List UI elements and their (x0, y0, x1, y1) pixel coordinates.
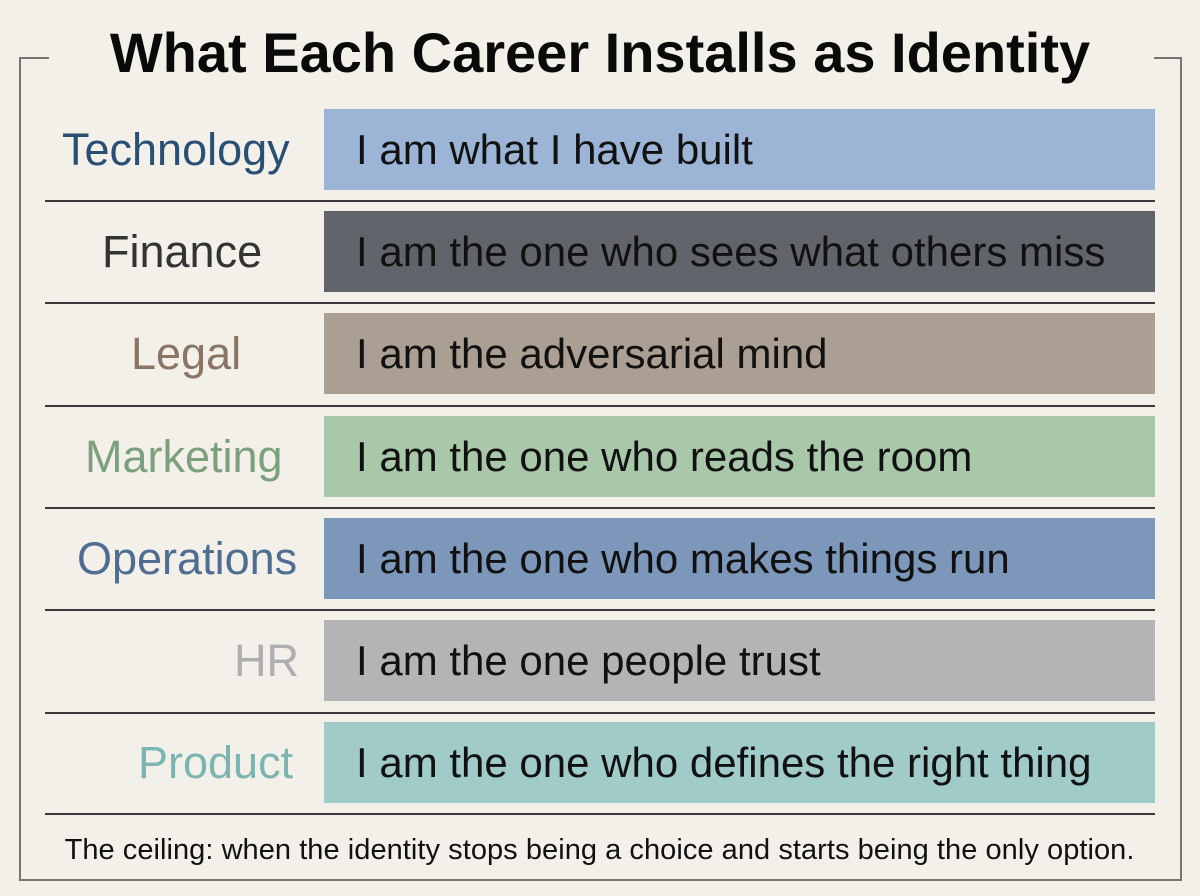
bar: HR: I am the one people trust (356, 637, 821, 684)
label: Product: Product (138, 737, 293, 788)
row: Operations (77, 518, 1155, 599)
bar: Technology (324, 109, 1155, 190)
bar: Legal (324, 313, 1155, 394)
bar: HR (324, 620, 1155, 701)
bar: Legal: I am the adversarial mind (356, 330, 828, 377)
row: HR (234, 620, 1155, 701)
label: Finance: Finance (102, 226, 262, 277)
row: Marketing (85, 416, 1155, 497)
bar: Technology: I am what I have built (356, 126, 753, 173)
label: Operations: Operations (77, 533, 297, 584)
label: HR: HR (234, 635, 299, 686)
row: Legal (131, 313, 1155, 394)
bar: Finance: I am the one who sees what others miss (356, 228, 1105, 275)
label: Legal: Legal (131, 328, 241, 379)
row: Finance (102, 211, 1155, 292)
label: Marketing: Marketing (85, 431, 283, 482)
row: Technology (62, 109, 1155, 190)
bar: Marketing (324, 416, 1155, 497)
bar: Finance (324, 211, 1155, 292)
bar: Product (324, 722, 1155, 803)
title: What Each Career Installs as Identity (110, 21, 1090, 84)
bar: Operations (324, 518, 1155, 599)
bar: Operations: I am the one who makes things run (356, 535, 1010, 582)
label: Technology: Technology (62, 124, 290, 175)
bar: Marketing: I am the one who reads the room (356, 433, 972, 480)
row: Product (138, 722, 1155, 803)
footer note: The ceiling: when the identity stops being a choice and starts being the only option. (65, 834, 1134, 866)
bar: Product: I am the one who defines the right thing (356, 739, 1091, 786)
